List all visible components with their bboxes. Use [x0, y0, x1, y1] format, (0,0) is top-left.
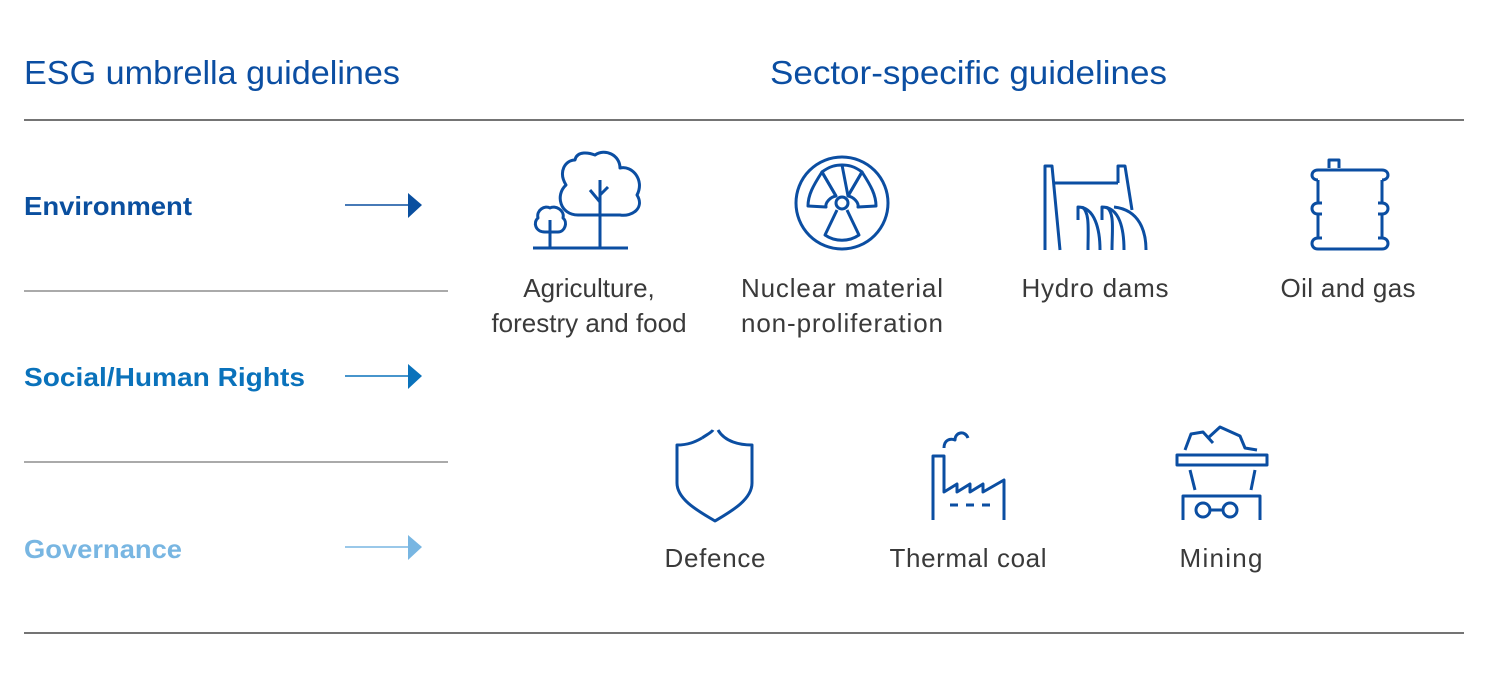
icon: radiation [796, 157, 888, 249]
label: Environment: Environment [24, 191, 192, 221]
title: Sector-specific guidelines: Sector-specific guidelines [770, 54, 1167, 91]
label: Social/Human Rights: Social/Human Rights [24, 362, 305, 392]
icon: oil barrel [1312, 160, 1388, 249]
label: Agriculture: forestry and food [491, 308, 687, 338]
icon: shield [677, 430, 752, 521]
arrow: Environment [345, 193, 422, 218]
label: Hydro dams: Hydro dams [1022, 273, 1168, 303]
label: Nuclear line 2: non-proliferation [741, 308, 943, 338]
icon: hydro dam [1045, 166, 1146, 250]
label: Oil and gas: Oil and gas [1280, 273, 1416, 303]
icon: mining cart [1177, 427, 1267, 520]
label: Thermal coal: Thermal coal [890, 543, 1046, 573]
label: Defence: Defence [664, 543, 766, 573]
icon: tree [533, 152, 639, 248]
arrow: Social [345, 364, 422, 389]
icon: factory [933, 433, 1004, 520]
label: Mining: Mining [1180, 543, 1262, 573]
arrow: Governance [345, 535, 422, 560]
title: ESG umbrella guidelines: ESG umbrella guidelines [24, 54, 400, 91]
label: Governance: Governance [24, 534, 182, 564]
label: Agriculture: Agriculture, [523, 273, 655, 303]
label: Nuclear: Nuclear material [741, 273, 943, 303]
